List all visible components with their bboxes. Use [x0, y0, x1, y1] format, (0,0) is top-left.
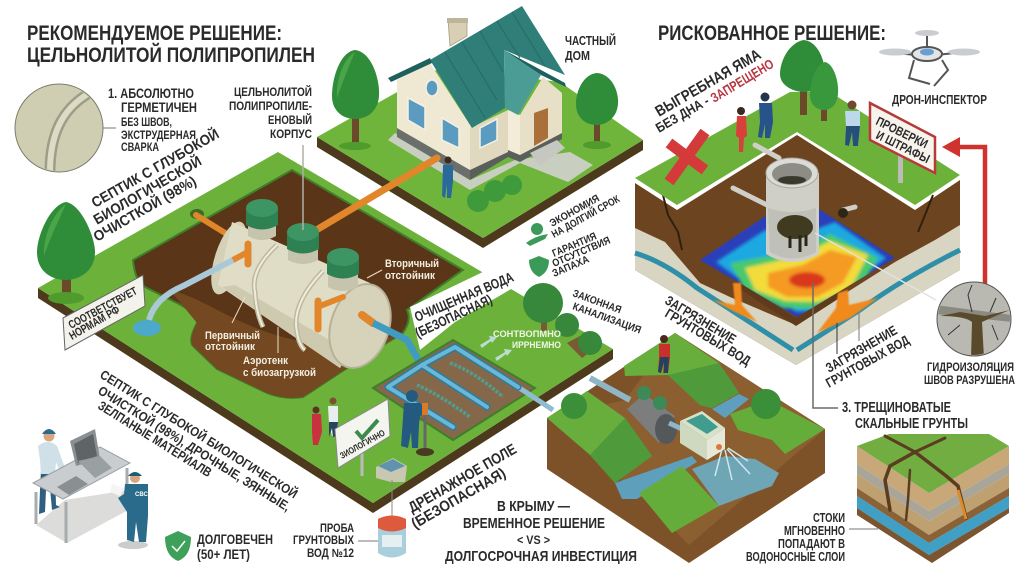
line: body leader: [302, 145, 304, 230]
icon: shield small: [529, 256, 549, 277]
text: effluent reach aquifers: ПОПАДАЮТ В: [778, 537, 845, 551]
text: groundwater sample: ГРУНТОВЫХ: [293, 533, 354, 547]
tree and bushes on right of plot: [523, 283, 602, 358]
text: Crimea summary: [445, 498, 637, 565]
sign: norms: СООТВЕТСТВУЕТ: [67, 285, 140, 332]
label: private house: [565, 33, 616, 63]
icon: weld circle: [15, 84, 116, 172]
text: septic description: ЗЕЛПАНЫЕ МАТЕРИАЛВ: [95, 398, 214, 480]
heat map floor: [700, 209, 895, 317]
tank: [204, 199, 401, 376]
leak stains: [838, 208, 848, 218]
bushes near house: [467, 175, 522, 212]
title: risky solution: РИСКОВАННОЕ РЕШЕНИЕ:: [658, 22, 886, 45]
pipe and puddle left: [133, 260, 233, 336]
text: smell guarantee: ОТСУТСТВИЯ: [550, 234, 612, 270]
label: flow text: СОНТВОПМНО: [493, 329, 561, 340]
woman in red: [736, 107, 747, 152]
text: groundwater sample: [293, 521, 354, 560]
panel: septic plot: [37, 152, 613, 513]
text: monolithic body: [229, 84, 312, 141]
sign: inspections and fines: [870, 103, 935, 183]
left hill: [547, 391, 652, 483]
cover 1: [246, 199, 278, 240]
red cross: [669, 132, 705, 182]
text: effluent reach aquifers: ВОДОНОСНЫЕ СЛОИ: [746, 550, 845, 564]
text: durable: (50+ ЛЕТ): [197, 546, 250, 562]
text: groundwater pollution left: ГРУНТОВЫХ ВОД: [662, 306, 754, 369]
text: fractured rock: СКАЛЬНЫЕ ГРУНТЫ: [855, 416, 968, 432]
text: legal sewer: КАНАЛИЗАЦИЯ: [571, 301, 643, 336]
text: monolithic body: ЦЕЛЬНОЛИТОЙ: [234, 84, 312, 99]
title: recommended solution: ЦЕЛЬНОЛИТОЙ ПОЛИПРОПИЛЕН: [27, 43, 315, 67]
concrete box: [680, 411, 725, 460]
rock layers right: [796, 225, 960, 365]
front soil band: [740, 283, 838, 326]
text: durable: ДОЛГОВЕЧЕН: [197, 531, 273, 547]
red arrow: [942, 137, 985, 285]
text: drainage field: ДРЕНАЖНОЕ ПОЛЕ: [406, 441, 520, 516]
text: groundwater sample: ПРОБА: [320, 521, 354, 535]
icon: coin and hand: [526, 223, 548, 246]
pipe: left stub: [190, 209, 230, 236]
rock layers left: [635, 228, 796, 365]
text: Crimea summary: < VS >: [517, 533, 550, 547]
text: Crimea summary: ВРЕМЕННОЕ РЕШЕНИЕ: [463, 515, 605, 532]
police officer: [758, 92, 773, 138]
text: groundwater pollution right: ЗАГРЯЗНЕНИЕ: [823, 323, 900, 376]
chimney: [447, 18, 468, 46]
sample box: [376, 458, 407, 482]
panel: house plot: [317, 6, 643, 248]
pollution plume left: [713, 283, 757, 322]
text: groundwater pollution right: ГРУНТОВЫХ ВОД: [823, 332, 912, 391]
inspector with tablet: [845, 100, 860, 146]
text: hermetic: СВАРКА: [121, 142, 159, 154]
text: effluent reach aquifers: СТОКИ: [813, 511, 845, 525]
worker with auger: [401, 390, 434, 456]
text: smell guarantee: ЗАПАХА: [550, 253, 591, 280]
pit: [133, 170, 463, 398]
title: recommended solution: РЕКОМЕНДУЕМОЕ РЕШЕНИЕ:: [27, 22, 282, 45]
text: waterproofing destroyed: [924, 360, 1015, 387]
tank labels: Аэротенк: [243, 355, 288, 367]
text: monolithic body: ПОЛИПРОПИЛЕ-: [229, 99, 312, 113]
text: economy benefit: ЭКОНОМИЯ: [548, 192, 602, 230]
sign: inspections and fines: И ШТРАФЫ: [874, 128, 932, 166]
stream: [615, 394, 749, 499]
bushes: [561, 389, 781, 419]
text: septic heading rotated: ОЧИСТКОЙ (98%): [90, 172, 200, 245]
inspector: СВС: [135, 492, 148, 498]
text: pit forbidden: БЕЗ ДНА -: [653, 93, 712, 136]
text: smell guarantee: ГАРАНТИЯ: [550, 230, 598, 260]
person in red: [658, 335, 670, 373]
tree: right of house: [576, 73, 618, 149]
concrete ring: [766, 158, 819, 262]
house: [388, 6, 566, 180]
tank labels: отстойник: [385, 270, 435, 282]
tank labels: Первичный: [205, 330, 260, 342]
grass top: [635, 92, 960, 205]
label: flow text: [493, 329, 561, 351]
text: hermetic: БЕЗ ШВОВ,: [121, 117, 172, 129]
person near house: [442, 156, 453, 198]
label: flow text: ИРРНЕМНО: [512, 340, 561, 351]
label: private house: ДОМ: [565, 49, 590, 63]
text: legal sewer: [571, 288, 643, 336]
discharge arrows: [715, 448, 750, 480]
text: monolithic body: ЕНОВЫЙ: [268, 112, 312, 127]
text: monolithic body: КОРПУС: [270, 127, 312, 141]
tank labels: Вторичный: [385, 258, 439, 270]
label: drone inspector: ДРОН-ИНСПЕКТОР: [892, 93, 987, 107]
fittings: [233, 244, 373, 329]
text: groundwater pollution left: ЗАГРЯЗНЕНИЕ: [662, 293, 739, 347]
label: private house: ЧАСТНЫЙ: [565, 33, 616, 48]
text: septic heading rotated: БИОЛОГИЧЕСКОЙ: [90, 152, 205, 228]
soil cracks: [663, 195, 933, 250]
text: septic description: СЕПТИК С ГЛУБОКОЙ БИОЛОГИЧЕСКОЙ: [97, 367, 300, 501]
text: fractured rock: 3. ТРЕЩИНОВАТЫЕ: [842, 400, 951, 416]
text: fractured rock: [842, 400, 968, 432]
cover 3: [327, 248, 359, 291]
arrows: flow: [480, 336, 512, 361]
sign: biologically: ЗИОЛОГИЧНО: [338, 428, 387, 461]
trees on risky plot: [780, 40, 838, 121]
tank labels: отстойник: [205, 341, 255, 353]
cracks: [885, 436, 966, 520]
panel: fractured block: [857, 434, 1009, 563]
text: economy benefit: НА ДОЛГИЙ СРОК: [549, 192, 622, 241]
text: hermetic: ГЕРМЕТИЧЕН: [121, 100, 197, 115]
tree: left plot: [37, 202, 95, 304]
grey pipes: [733, 145, 855, 210]
text: pit forbidden: ЗАПРЕЩЕНО: [708, 56, 776, 106]
pond: [692, 456, 779, 506]
pipe to landscape: [590, 378, 630, 400]
equipment case: [57, 429, 112, 495]
pollution plume right: [817, 290, 878, 333]
cover 2: [287, 223, 319, 264]
back hill: [624, 333, 739, 408]
text: hermetic: ЭКСТРУДЕРНАЯ: [121, 130, 196, 142]
tree: left of house: [332, 50, 379, 150]
tank labels: с биозагрузкой: [243, 367, 316, 379]
panel: landscape block: [547, 333, 825, 563]
white label backing and clean water text: ОЧИЩЕННАЯ ВОДА: [412, 269, 516, 325]
text: hermetic: [108, 86, 197, 154]
drainage field: [373, 340, 553, 440]
front grass: [639, 466, 719, 533]
text: effluent reach aquifers: [746, 511, 878, 564]
icon: drone: [879, 30, 980, 86]
icon: magnified crack: [935, 282, 1012, 358]
tank labels: [205, 258, 439, 379]
text: septic heading rotated: СЕПТИК С ГЛУБОКОЙ: [88, 125, 222, 211]
text: Crimea summary: ДОЛГОСРОЧНАЯ ИНВЕСТИЦИЯ: [445, 548, 637, 565]
sign: norms: НОРМАМ РФ: [68, 304, 122, 343]
text: septic heading rotated: [88, 125, 222, 245]
title: recommended solution: [27, 22, 315, 67]
text: Crimea summary: В КРЫМУ —: [497, 498, 570, 515]
person at table: [38, 429, 65, 514]
text: septic description: ОЧИСТКОЙ (98%), ДРОЧНЫЕ, ЗЯННЫЕ,: [95, 383, 293, 514]
people near sign: [312, 398, 338, 445]
text: durable: [197, 531, 273, 562]
sign: norms: [63, 275, 145, 350]
pipe: treated water outlet: [373, 323, 420, 363]
right hill: [730, 400, 825, 454]
lab scene: [33, 429, 148, 549]
leader lines: [813, 233, 936, 408]
white label backing and clean water text: (БЕЗОПАСНАЯ): [413, 291, 494, 341]
text: legal sewer: ЗАКОННАЯ: [571, 288, 623, 316]
text: drainage field: (БЕЗОПАСНАЯ): [408, 465, 509, 532]
text: groundwater sample: ВОД №12: [307, 546, 354, 560]
text: effluent reach aquifers: МГНОВЕННО: [784, 524, 845, 538]
panel: risky pit block: [635, 40, 960, 408]
pipe: inlet from house: [318, 158, 437, 229]
grey tank: [627, 386, 682, 444]
shield icon: [165, 531, 191, 561]
text: pit forbidden: ВЫГРЕБНАЯ ЯМА: [652, 46, 764, 120]
sign: inspections and fines: ПРОВЕРКИ: [874, 114, 930, 151]
icon: sample jar: [358, 480, 406, 558]
sign: biologically: [335, 399, 390, 476]
text: hermetic: 1. АБСОЛЮТНО: [108, 86, 194, 101]
